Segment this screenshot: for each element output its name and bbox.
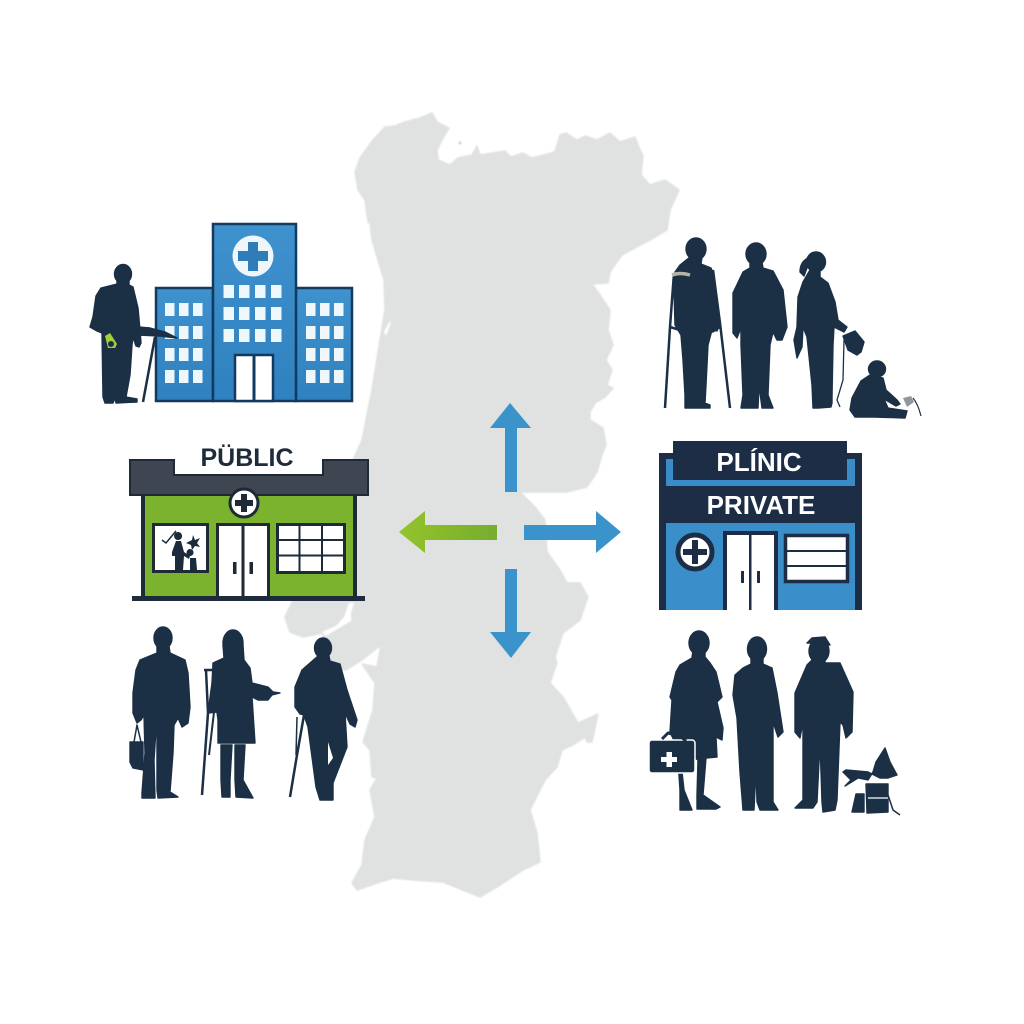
label: PÜBLIC: PÜBLIC bbox=[200, 443, 294, 472]
person with cane by hospital bbox=[90, 264, 177, 403]
seated animal figure bbox=[843, 748, 900, 815]
man with cap bbox=[795, 637, 853, 812]
public clinic left window with figures bbox=[154, 524, 208, 572]
private clinic blue fascia bbox=[666, 459, 855, 486]
person on crutches bbox=[665, 238, 730, 408]
arrow: left bbox=[399, 511, 497, 553]
people group: top right bbox=[665, 238, 921, 418]
public clinic green body bbox=[144, 494, 354, 598]
private clinic cross sign bbox=[678, 535, 712, 569]
label: PRIVATE: PRIVATE bbox=[707, 490, 815, 520]
map of Portugal bbox=[285, 113, 679, 897]
hospital windows bbox=[165, 285, 344, 383]
people group: bottom left bbox=[130, 627, 357, 800]
arrow: up bbox=[490, 403, 531, 492]
people group: bottom right bbox=[649, 631, 900, 815]
arrow: down bbox=[490, 569, 531, 658]
man with first-aid kit bbox=[649, 631, 723, 810]
hospital cross sign bbox=[232, 236, 274, 276]
hospital building bbox=[156, 224, 352, 401]
label: PLÍNIC: PLÍNIC bbox=[716, 447, 802, 477]
public clinic bbox=[130, 443, 368, 601]
standing person bbox=[733, 243, 787, 408]
private clinic door bbox=[723, 531, 778, 610]
public clinic cross sign bbox=[230, 489, 258, 517]
hospital right wing bbox=[295, 288, 352, 401]
private clinic top sign bbox=[673, 441, 847, 480]
hospital door bbox=[235, 355, 273, 401]
arrow: right bbox=[524, 511, 621, 553]
private clinic window bbox=[785, 536, 848, 582]
woman with ponytail and device bbox=[794, 252, 864, 408]
public clinic base bbox=[132, 596, 365, 601]
man standing centre bbox=[733, 637, 783, 810]
private clinic blue body bbox=[666, 523, 855, 610]
woman with crutch and tray bbox=[202, 630, 280, 798]
seated child bbox=[850, 361, 921, 418]
man with bag bbox=[130, 627, 190, 798]
private clinic bbox=[659, 441, 862, 610]
public clinic right window bbox=[277, 524, 345, 572]
public clinic roof bbox=[130, 460, 368, 495]
hospital left wing bbox=[156, 288, 213, 401]
private clinic dark frame bbox=[659, 453, 862, 610]
hospital central tower bbox=[213, 224, 296, 401]
man on crutch bbox=[290, 638, 357, 800]
public clinic door bbox=[218, 524, 268, 598]
public clinic side posts bbox=[141, 494, 357, 598]
